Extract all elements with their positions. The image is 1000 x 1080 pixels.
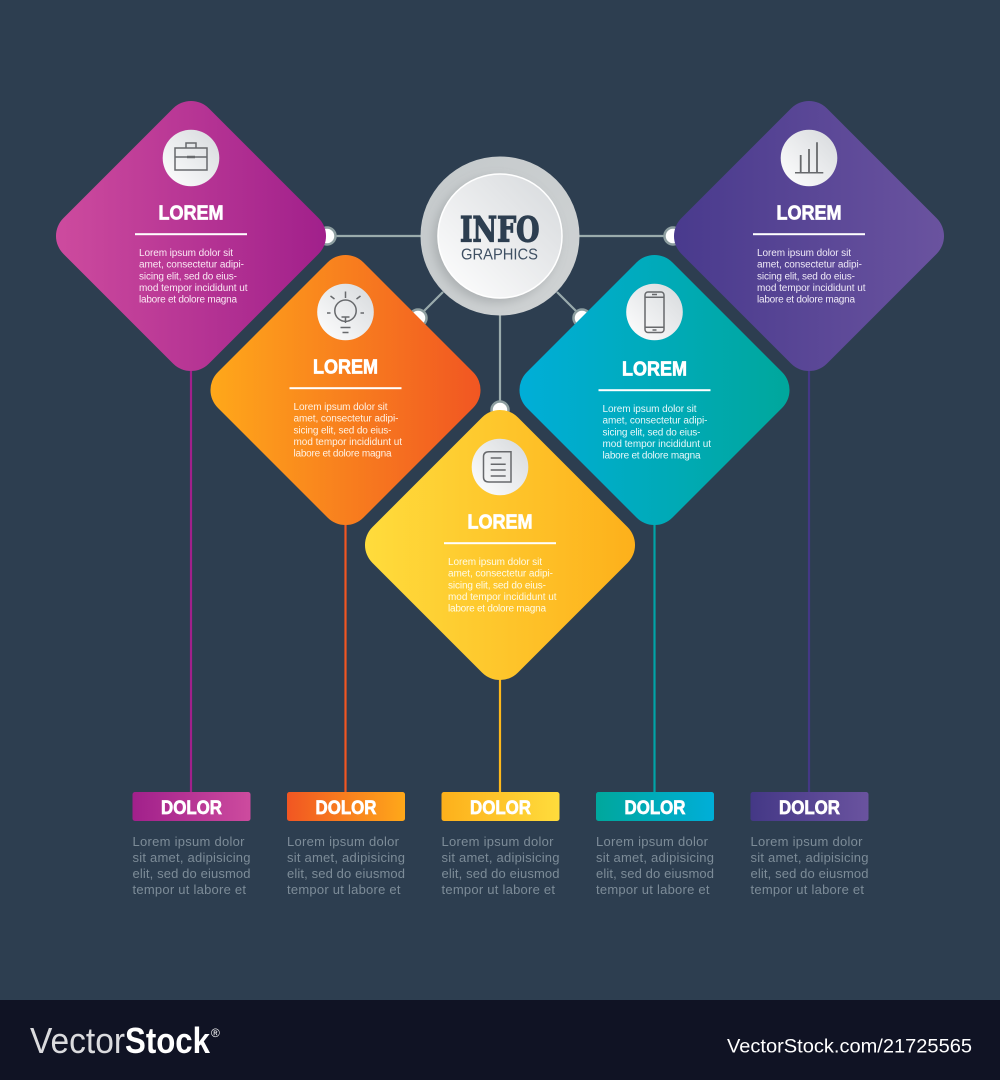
icon: smartphone [645,292,664,332]
column 3: tag and description: elit, sed do eiusmod [442,866,560,881]
column 1: tag and description: DOLOR [161,797,222,819]
icon: bar chart [795,142,823,173]
column 3: tag and description [442,792,560,897]
icon: document [484,452,511,482]
panel: yellow diamond [365,410,635,680]
column 5: tag and description: sit amet, adipisicing [750,850,868,865]
column 3: tag and description: DOLOR [470,797,531,819]
column 2: tag and description: elit, sed do eiusmod [287,866,405,881]
column 2: tag and description [287,792,405,897]
title: LOREM [622,358,687,380]
column 4: tag and description: Lorem ipsum dolor [596,834,709,849]
column 1: tag and description: tempor ut labore et [132,882,246,897]
column 5: tag and description: Lorem ipsum dolor [750,834,863,849]
column 2: tag and description: DOLOR [316,797,376,819]
body text: labore et dolore magna [757,295,855,306]
column 4: tag and description: sit amet, adipisicing [596,850,714,865]
column 2: tag and description: sit amet, adipisicing [287,850,405,865]
column 2: tag and description: tempor ut labore et [287,882,401,897]
body text: labore et dolore magna [139,295,237,306]
body text: amet, consectetur adipi- [448,569,553,580]
footer logo: ® [211,1026,220,1040]
body text [448,557,557,615]
column 1: tag and description: sit amet, adipisicing [132,850,250,865]
column 4: tag and description: tempor ut labore et [596,882,710,897]
footer logo: Stock [125,1020,211,1061]
heading: INFO: INFO [460,210,540,251]
body text: mod tempor incididunt ut [294,437,402,448]
subheading: GRAPHICS: GRAPHICS [461,246,538,263]
body text: amet, consectetur adipi- [139,260,244,271]
column 5: tag and description: elit, sed do eiusmod [750,866,868,881]
body text [757,248,866,306]
body text [139,248,248,306]
body text: labore et dolore magna [294,449,392,460]
body text: labore et dolore magna [448,604,546,615]
panel: purple diamond [674,101,944,371]
title: LOREM [468,511,532,533]
body text: sicing elit, sed do eius- [294,425,392,436]
body text: Lorem ipsum dolor sit [757,248,851,259]
title: LOREM [776,202,842,224]
column 4: tag and description [596,792,714,897]
column 4: tag and description: elit, sed do eiusmod [596,866,714,881]
body text: Lorem ipsum dolor sit [294,402,388,413]
column 2: tag and description: Lorem ipsum dolor [287,834,400,849]
body text: sicing elit, sed do eius- [757,271,855,282]
column 1: tag and description: Lorem ipsum dolor [132,834,245,849]
icon: briefcase [175,143,207,170]
body text: amet, consectetur adipi- [294,414,398,425]
body text [294,402,402,460]
body text: Lorem ipsum dolor sit [448,557,542,568]
body text: amet, consectetur adipi- [757,260,862,271]
title: LOREM [158,202,224,224]
footer image id: VectorStock.com/21725565 [727,1036,972,1058]
footer logo [30,1020,220,1061]
body text: Lorem ipsum dolor sit [602,404,697,415]
column 1: tag and description: elit, sed do eiusmod [132,866,250,881]
column 3: tag and description: Lorem ipsum dolor [442,834,554,849]
column 5: tag and description [750,792,868,897]
column 5: tag and description: tempor ut labore et [750,882,864,897]
column 3: tag and description: tempor ut labore et [442,882,555,897]
body text: labore et dolore magna [602,451,701,462]
body text [602,404,711,462]
connector lines and dots [318,228,682,418]
footer bar [0,1000,1000,1080]
panel: magenta diamond [56,101,326,371]
column 5: tag and description: DOLOR [779,797,840,819]
body text: sicing elit, sed do eius- [602,427,700,438]
column 3: tag and description: sit amet, adipisicing [442,850,560,865]
title: LOREM [313,356,378,378]
column 4: tag and description: DOLOR [624,797,686,819]
icon: light bulb [327,292,364,332]
body text: mod tempor incididunt ut [448,592,557,603]
body text: amet, consectetur adipi- [602,416,708,427]
footer logo: Vector [30,1020,125,1061]
central circle: info graphics [420,156,580,316]
stem lines [191,360,809,793]
panel: teal diamond [519,255,790,525]
body text: sicing elit, sed do eius- [139,271,237,282]
body text: mod tempor incididunt ut [757,283,866,294]
body text: sicing elit, sed do eius- [448,580,546,591]
body text: mod tempor incididunt ut [139,283,248,294]
body text: mod tempor incididunt ut [602,439,711,450]
column 1: tag and description [132,792,250,897]
body text: Lorem ipsum dolor sit [139,248,233,259]
panel: orange diamond [210,255,481,525]
